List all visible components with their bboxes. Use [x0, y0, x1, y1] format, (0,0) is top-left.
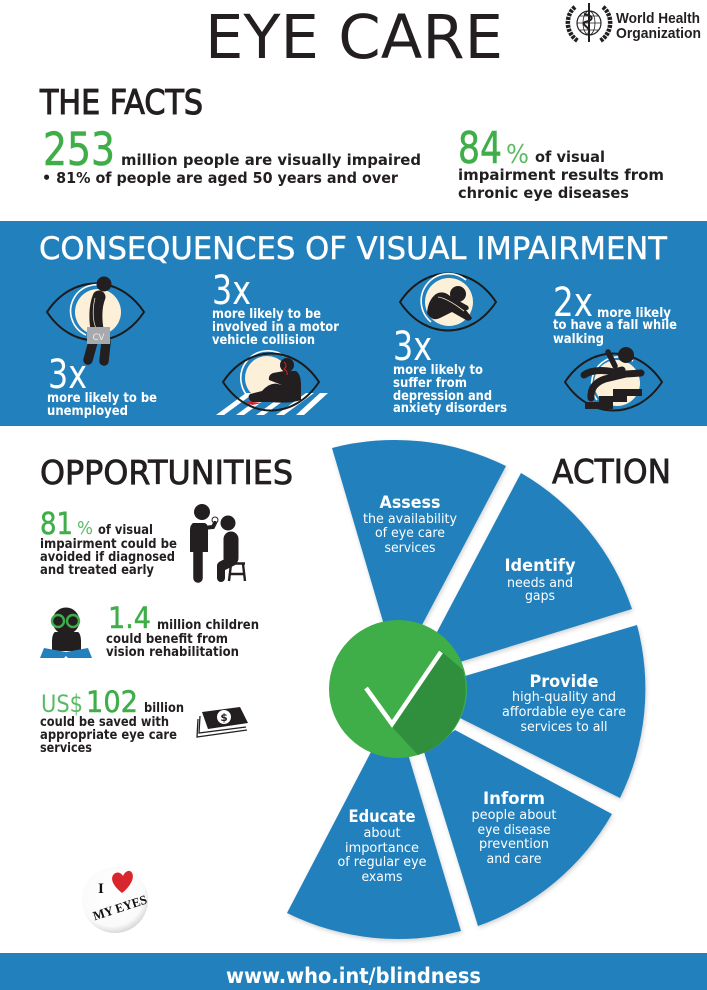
segment: identify: gaps — [525, 589, 555, 604]
stat: 3x motor vehicle collision — [212, 268, 339, 348]
stat: 1.4 million children: vision rehabilitation — [106, 644, 239, 660]
logo: World Health Organization: World Health — [616, 10, 700, 27]
heading: consequences: CONSEQUENCES OF VISUAL IMPAIRMENT — [39, 231, 668, 267]
stat: 81% avoidable: avoided if diagnosed — [40, 549, 175, 565]
panel: opportunities list — [40, 504, 259, 933]
title: EYE CARE — [205, 2, 503, 73]
icon: I love my eyes badge — [82, 867, 149, 933]
stat: 2x fall while walking: more likely — [597, 305, 671, 321]
stat: 3x unemployed: 3x — [48, 352, 87, 398]
icon: I love my eyes badge: I — [98, 881, 104, 897]
stat: 81% avoidable: and treated early — [40, 562, 154, 578]
segment: provide: affordable eye care — [502, 705, 626, 720]
fact: 84%: 84 — [458, 123, 502, 174]
stat: 81% avoidable: of visual — [98, 522, 153, 538]
segment: inform: and care — [486, 852, 542, 867]
segment: assess: services — [384, 541, 436, 556]
heading: opportunities: OPPORTUNITIES — [40, 453, 293, 492]
footer: www.who.int/blindness — [226, 964, 481, 988]
stat: 1.4 million children: could benefit from — [106, 631, 228, 647]
stat: 2x fall while walking: to have a fall while — [553, 317, 677, 333]
icon: WHO emblem — [568, 3, 610, 42]
heading: action: ACTION — [552, 452, 671, 491]
segment: educate: of regular eye — [338, 855, 426, 870]
stat: 1.4 million children — [106, 601, 259, 660]
icon: stack of money: $ — [220, 712, 228, 724]
segment: educate: about — [364, 826, 400, 841]
icon: eye with unemployed person: CV — [93, 333, 105, 343]
stat: US$102 billion: 102 — [86, 685, 138, 719]
fact: 84%: chronic eye diseases — [458, 184, 629, 202]
segment: inform — [424, 730, 612, 926]
stat: US$102 billion: services — [40, 740, 92, 756]
segment: assess — [332, 440, 506, 625]
icon: stack of money — [197, 707, 248, 737]
segment: provide: Provide — [530, 672, 598, 692]
segment: inform: prevention — [479, 837, 549, 852]
stat: 3x depression and anxiety: suffer from — [393, 375, 467, 391]
stat: 2x fall while walking: 2x — [553, 280, 593, 326]
stat: 2x fall while walking — [553, 280, 677, 347]
stat: 1.4 million children: million children — [157, 617, 259, 633]
heading: the facts: THE FACTS — [39, 83, 203, 123]
stat: US$102 billion: could be saved with — [40, 714, 169, 730]
fact: 84%: impairment results from — [458, 166, 664, 184]
segment: identify: needs and — [507, 576, 573, 591]
icon: doctor examining patient — [190, 504, 245, 581]
icon: eye with unemployed person — [47, 276, 144, 361]
segment: educate: importance — [345, 841, 419, 856]
stat: 3x unemployed: unemployed — [47, 403, 128, 419]
stat: 3x motor vehicle collision: vehicle collision — [212, 332, 315, 348]
segment: educate — [287, 750, 461, 939]
fact: 253 million — [42, 123, 421, 187]
stat: 3x unemployed: more likely to be — [47, 390, 157, 406]
footer — [0, 953, 707, 990]
stat: 3x unemployed — [47, 352, 157, 419]
stat: 81% avoidable: impairment could be — [40, 536, 177, 552]
icon: eye with car collision victim — [216, 351, 328, 415]
stat: 3x depression and anxiety: anxiety disorders — [393, 400, 507, 416]
segment: educate: Educate — [348, 807, 416, 827]
stat: US$102 billion — [40, 685, 184, 756]
stat: 3x motor vehicle collision: involved in a motor — [212, 319, 339, 335]
stat: 2x fall while walking: walking — [553, 331, 604, 347]
stat: 3x depression and anxiety: more likely to — [393, 362, 483, 378]
stat: US$102 billion: billion — [144, 700, 184, 716]
segment: inform: eye disease — [478, 823, 550, 838]
stat: US$102 billion: appropriate eye care — [40, 727, 177, 743]
stat: 3x depression and anxiety — [393, 324, 507, 416]
fact: 253 million: million people are visually impaired — [121, 151, 421, 169]
logo: World Health Organization — [568, 3, 701, 42]
segment: educate: exams — [362, 870, 403, 885]
fact: 84%: of visual — [535, 148, 605, 166]
fact: 253 million: • 81% of people are aged 50 years and over — [42, 169, 399, 187]
panel: the facts — [39, 83, 664, 202]
stat: 81% avoidable — [40, 507, 177, 578]
segment: assess: Assess — [380, 493, 440, 513]
chart: action wheel — [287, 440, 645, 939]
stat: 81% avoidable: 81 — [40, 507, 73, 542]
stat: 3x depression and anxiety: depression and — [393, 388, 492, 404]
segment: inform: people about — [472, 808, 556, 823]
segment: inform: Inform — [483, 789, 545, 809]
stat: US$102 billion: US$ — [41, 690, 83, 718]
icon: green check mark circle — [329, 620, 467, 758]
fact: 84% — [458, 123, 664, 202]
segment: provide — [460, 625, 645, 798]
segment: provide: high-quality and — [512, 690, 616, 705]
segment: assess: of eye care — [375, 526, 445, 541]
icon: eye with depressed person — [400, 274, 496, 330]
fact: 253 million: 253 — [43, 123, 115, 176]
segment: identify: Identify — [504, 556, 576, 576]
icon: I love my eyes badge: MY EYES — [91, 892, 149, 923]
stat: 1.4 million children: 1.4 — [108, 601, 151, 635]
panel: consequences of visual impairment — [0, 221, 707, 426]
icon: eye with person falling on stairs — [565, 347, 662, 410]
logo: World Health Organization: Organization — [616, 25, 701, 42]
fact: 84%: % — [506, 140, 529, 170]
segment: assess: the availability — [363, 512, 457, 527]
stat: 81% avoidable: % — [77, 518, 93, 539]
icon: child with glasses reading — [40, 608, 92, 658]
stat: 3x depression and anxiety: 3x — [393, 324, 432, 370]
stat: 3x motor vehicle collision: more likely to be — [212, 306, 321, 322]
segment: identify — [437, 473, 632, 662]
stat: 3x motor vehicle collision: 3x — [212, 268, 251, 314]
segment: provide: services to all — [520, 720, 608, 735]
